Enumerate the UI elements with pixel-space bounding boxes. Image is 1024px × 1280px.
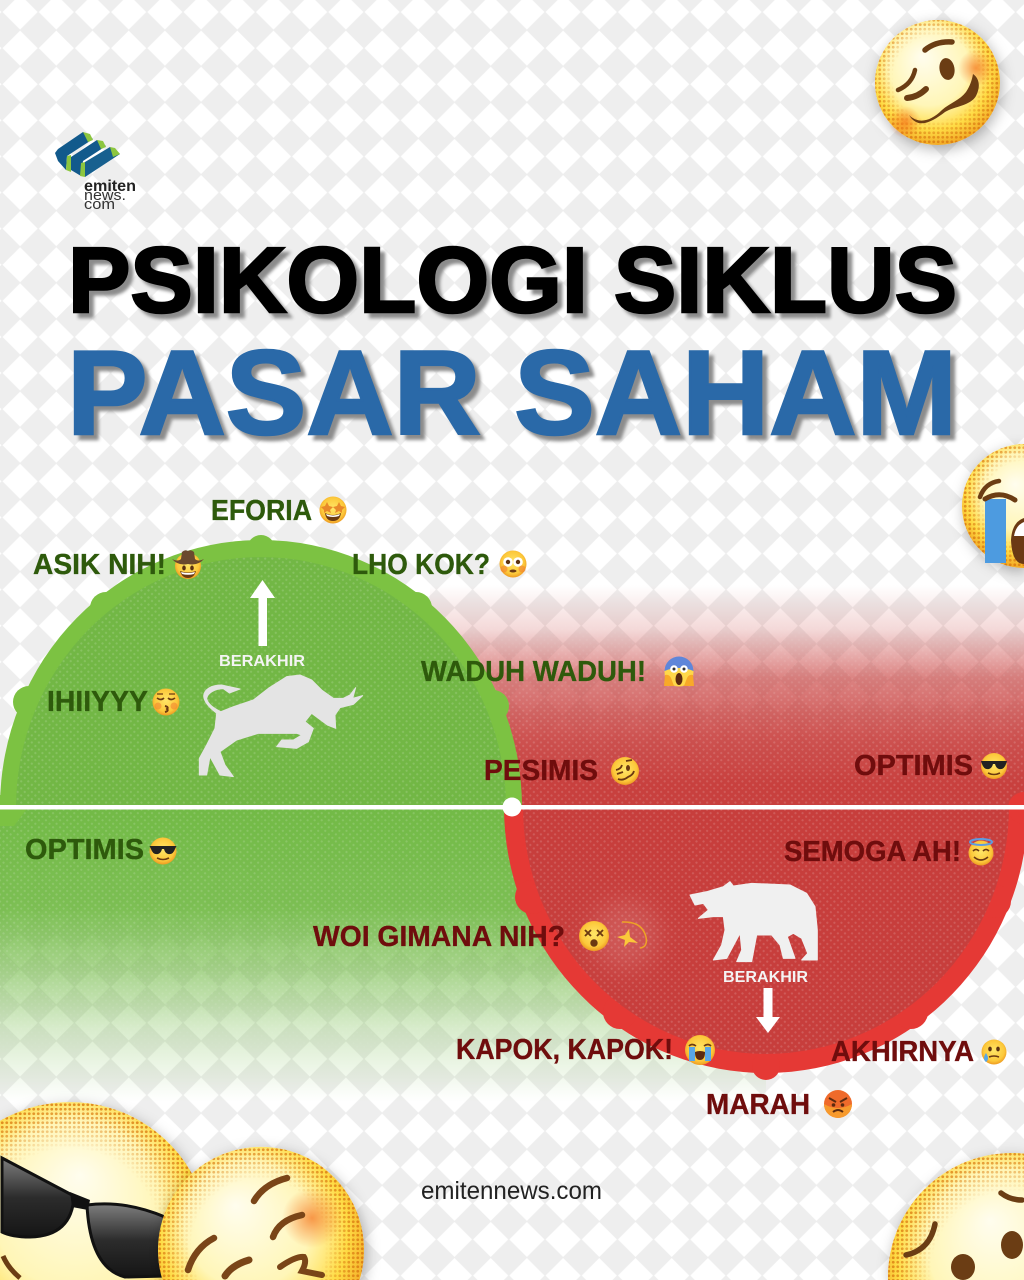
label: lho kok: LHO KOK? xyxy=(352,549,490,581)
icon: sunglasses face bottom left xyxy=(0,1102,210,1280)
label: akhirnya: AKHIRNYA xyxy=(831,1036,974,1068)
label: bear berakhir: BERAKHIR xyxy=(723,969,808,986)
label: ihiiyyy: IHIIYYY xyxy=(47,686,148,718)
icon: cowboy xyxy=(172,550,204,579)
axis center dot xyxy=(502,798,522,816)
icon: bear down arrow xyxy=(756,988,780,1033)
label: kapok kapok: KAPOK, KAPOK! xyxy=(456,1034,673,1066)
icon: halo xyxy=(968,839,994,866)
panel: green fade band below axis xyxy=(0,807,766,1102)
label: asik nih: ASIK NIH! xyxy=(33,549,166,581)
icon: bull silhouette xyxy=(199,675,363,777)
label: eforia: EFORIA xyxy=(211,495,312,527)
label: woi gimana nih: WOI GIMANA NIH? xyxy=(313,921,565,953)
panel: red bear half circle xyxy=(504,792,1024,1080)
icon: dizzy face xyxy=(579,921,609,951)
label: semoga ah: SEMOGA AH! xyxy=(784,836,961,868)
panel: red fade band above axis xyxy=(430,585,1024,807)
icon: sob xyxy=(685,1035,715,1065)
label: marah: MARAH xyxy=(706,1089,810,1121)
logo: emitennews.com: emiten xyxy=(84,178,136,195)
icon: woozy face bottom center xyxy=(158,1147,364,1280)
panel: green bull half circle xyxy=(0,535,522,826)
icon: flushed xyxy=(500,550,526,578)
icon: crying face right xyxy=(962,444,1024,568)
icon: sunglasses small xyxy=(981,753,1007,779)
title line 1: PSIKOLOGI SIKLUS xyxy=(68,228,957,332)
icon: angry xyxy=(824,1090,852,1118)
icon: star struck xyxy=(320,496,346,524)
logo: emitennews.com: com xyxy=(84,196,115,213)
icon: scream xyxy=(664,656,694,686)
label: optimis left: OPTIMIS xyxy=(25,834,144,866)
icon: tear smile xyxy=(982,1040,1006,1064)
icon: bear silhouette xyxy=(690,882,817,962)
title line 2: PASAR SAHAM xyxy=(67,326,957,460)
label: pesimis: PESIMIS xyxy=(484,755,598,787)
icon: woozy small xyxy=(611,757,639,785)
label: bull berakhir: BERAKHIR xyxy=(219,653,305,670)
logo: emitennews.com: news. xyxy=(84,187,126,204)
website url: emitennews.com xyxy=(421,1177,602,1205)
icon: sunglasses small left xyxy=(150,838,176,864)
logo: emitennews.com xyxy=(55,132,136,213)
axis line xyxy=(0,805,1024,810)
icon: woozy face top right xyxy=(875,20,1000,145)
label: waduh waduh: WADUH WADUH! xyxy=(421,656,646,688)
label: optimis right: OPTIMIS xyxy=(854,750,973,782)
icon: bull up arrow xyxy=(250,580,275,646)
icon: kissing xyxy=(152,688,180,716)
icon: dizzy star xyxy=(617,922,646,948)
icon: woozy face bottom right xyxy=(888,1153,1024,1280)
